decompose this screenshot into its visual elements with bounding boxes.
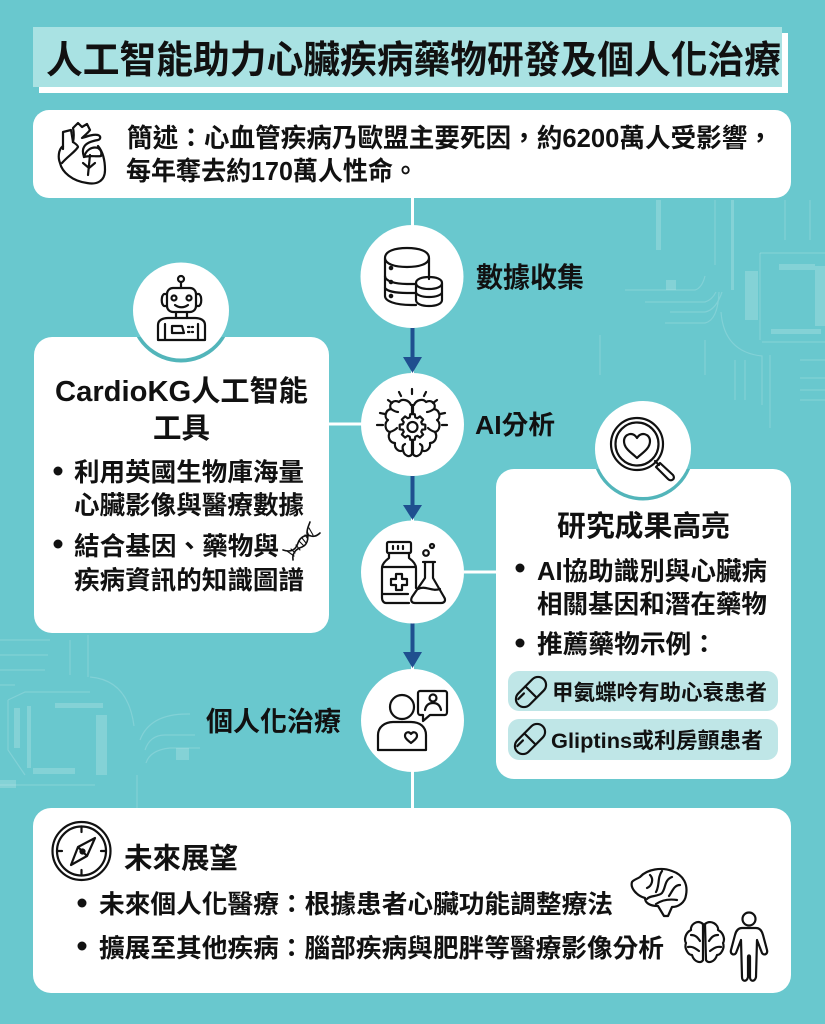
connector lines: [329, 198, 497, 810]
label: AI分析: [475, 410, 555, 440]
panel: summary: [33, 110, 791, 198]
label: 個人化治療: [206, 707, 341, 737]
icon: compass: [52, 822, 110, 880]
icon circle: magnifier with heart: [592, 398, 694, 500]
summary text: 簡述：心血管疾病乃歐盟主要死因，約6200萬人受影響，: [127, 123, 773, 153]
arrow: data collection to AI analysis: [403, 328, 422, 373]
summary text: [126, 123, 773, 186]
drug pill: nitrates: [508, 671, 778, 711]
bullets: [54, 459, 304, 595]
panel title: [55, 375, 308, 445]
panel: future outlook: [33, 808, 791, 993]
icon circle: robot: [130, 260, 232, 362]
icon: patient with chat bubble: [378, 691, 447, 750]
node: AI analysis: [361, 373, 555, 476]
icon: capsule: [513, 674, 549, 710]
panel title: 工具: [153, 413, 210, 445]
drug pill: nitrates: 甲氨蝶呤有助心衰患者: [552, 680, 767, 705]
icon: heart: [59, 123, 105, 183]
arrow: AI analysis to drugs: [403, 476, 422, 520]
icon: brain with gear: [377, 389, 447, 456]
panel: CardioKG tool: [34, 260, 329, 633]
icon: person outline: [731, 912, 767, 981]
panel title: CardioKG人工智能: [55, 375, 308, 408]
bullets: 未來個人化醫療：根據患者心臟功能調整療法: [99, 891, 613, 919]
icon: database: [385, 248, 442, 306]
icon: brain top view: [685, 922, 724, 962]
icon: DNA: [283, 522, 320, 560]
panel title: 未來展望: [124, 843, 238, 875]
panel title: 研究成果高亮: [557, 510, 730, 543]
bullets: 擴展至其他疾病：腦部疾病與肥胖等醫療影像分析: [99, 935, 664, 963]
icon: brain side view: [632, 869, 686, 916]
summary text: 每年奪去約170萬人性命。: [126, 156, 418, 186]
arrow: drugs to personalized treatment: [403, 623, 422, 668]
label: 數據收集: [476, 262, 584, 293]
title: 人工智能助力心臟疾病藥物研發及個人化治療: [46, 40, 781, 82]
bullets: 心臟影像與醫療數據: [74, 492, 304, 520]
icon: bottle and flask: [382, 542, 445, 603]
bullets: [516, 558, 767, 659]
node: drugs: [361, 520, 464, 624]
panel: research highlights: [496, 398, 791, 779]
bullets: 疾病資訊的知識圖譜: [74, 567, 304, 595]
bullets: AI協助識別與心臟病: [537, 558, 767, 586]
node: data collection: [360, 225, 584, 328]
bullets: 相關基因和潛在藥物: [537, 591, 767, 619]
bullets: 結合基因、藥物與: [74, 533, 279, 561]
bullets: 推薦藥物示例：: [537, 631, 717, 659]
drug pill: gliptins: Gliptins或利房顫患者: [551, 728, 763, 753]
bullets: [78, 891, 664, 963]
node: personalized treatment: [206, 669, 464, 772]
icon: capsule: [512, 721, 548, 757]
title: [33, 27, 788, 93]
bullets: 利用英國生物庫海量: [74, 459, 304, 487]
drug pill: gliptins: [508, 719, 778, 760]
